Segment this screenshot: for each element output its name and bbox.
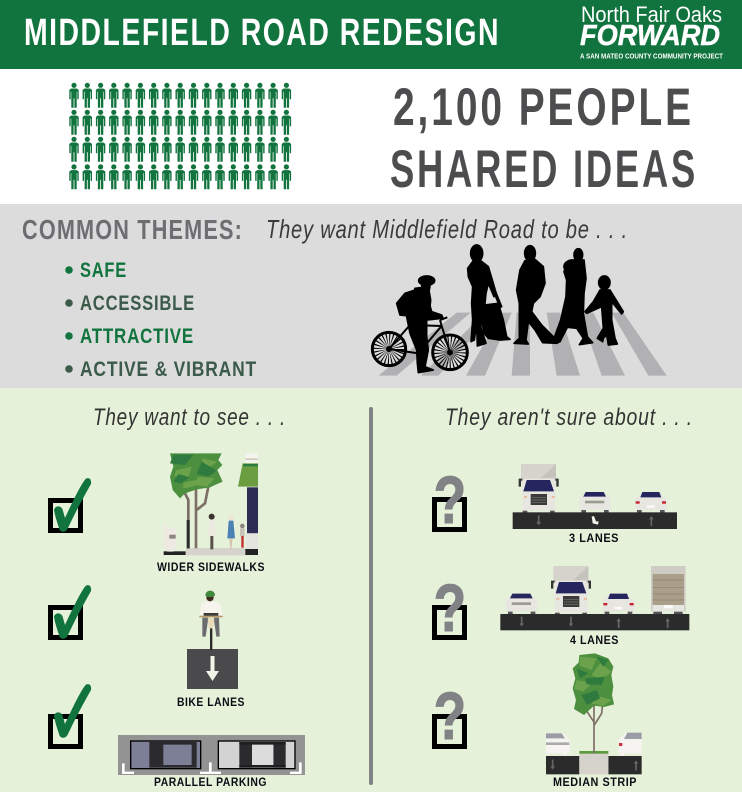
- list of themes: ACTIVE & VIBRANT: [80, 357, 257, 381]
- item: parallel parking: [50, 684, 305, 789]
- icon: checkbox: [50, 585, 91, 639]
- label: 3 LANES: [569, 531, 619, 545]
- icon: checkbox: [50, 478, 91, 532]
- illustration: three-lane road: [513, 464, 677, 529]
- divider line: [369, 407, 373, 785]
- illustration: four-lane road: [500, 566, 689, 630]
- label: BIKE LANES: [177, 695, 245, 709]
- icon: question box: ?: [434, 678, 466, 753]
- label: MEDIAN STRIP: [553, 775, 637, 789]
- item: 4 lanes: [434, 566, 689, 647]
- label: 4 LANES: [570, 633, 619, 647]
- logo: North Fair Oaks Forward: FORWARD: [580, 20, 720, 52]
- illustration: sidewalk scene: [164, 453, 258, 555]
- panel: opinions: [0, 388, 742, 792]
- heading: they want to see: They want to see . . .: [93, 404, 286, 431]
- item: bike lanes: [50, 585, 245, 709]
- logo: North Fair Oaks Forward: North Fair Oaks: [581, 2, 722, 27]
- list of themes: ATTRACTIVE: [80, 324, 194, 348]
- illustration: parked cars: [118, 735, 305, 775]
- illustration: cyclist on bike lane: [187, 591, 238, 689]
- label: WIDER SIDEWALKS: [157, 560, 265, 574]
- label: PARALLEL PARKING: [154, 775, 267, 789]
- pictogram: grid of people: [69, 83, 291, 189]
- icon: checkbox: [50, 684, 91, 746]
- subheading: They want Middlefield Road to be . . .: [266, 214, 628, 244]
- illustration: pedestrians and cyclist on crosswalk: [372, 245, 667, 376]
- logo: North Fair Oaks Forward: [580, 2, 724, 60]
- list of themes: SAFE: [80, 258, 127, 282]
- logo: North Fair Oaks Forward: A SAN MATEO COUNTY COMMUNITY PROJECT: [580, 54, 724, 60]
- icon: question box: ?: [434, 570, 466, 645]
- title: MIDDLEFIELD ROAD REDESIGN: [24, 12, 500, 54]
- item: median strip: [434, 653, 642, 789]
- list of themes: ACCESSIBLE: [80, 291, 195, 315]
- panel: participation: [0, 69, 742, 204]
- item: 3 lanes: [434, 462, 677, 545]
- heading: common themes: COMMON THEMES:: [22, 214, 243, 245]
- headline: 2,100 people shared ideas: [390, 78, 698, 199]
- header banner: [0, 0, 742, 69]
- list of themes: [65, 258, 257, 381]
- illustration: median with tree: [546, 653, 642, 774]
- panel: common themes: [0, 204, 742, 388]
- icon: question box: ?: [434, 462, 466, 537]
- item: wider sidewalks: [50, 453, 265, 574]
